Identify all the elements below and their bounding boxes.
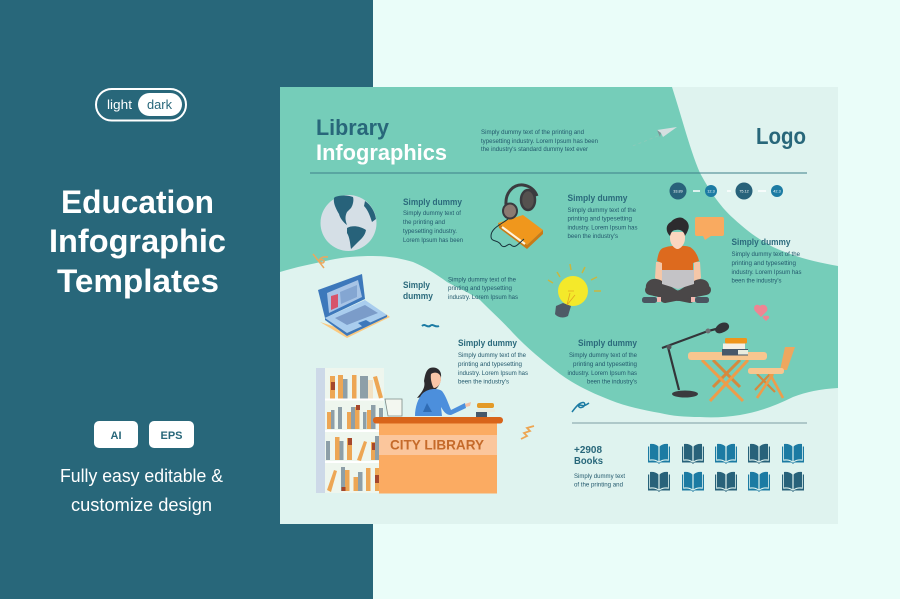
legs <box>650 290 706 298</box>
tagline: customize design <box>71 495 212 515</box>
intro text: Simply dummy text of the printing and <box>481 129 584 136</box>
icon: globe <box>320 195 376 251</box>
squiggle: orange <box>521 426 534 439</box>
text block: laptop heading: dummy <box>403 291 433 301</box>
speech bubble <box>695 217 724 240</box>
hair <box>667 218 689 236</box>
green wave background <box>280 87 838 417</box>
stat: books count <box>574 445 625 488</box>
text block: librarian: been the industry's <box>458 378 509 386</box>
main title: Education <box>61 184 214 220</box>
stat: books count: +2908 <box>574 445 602 456</box>
illustration: person with laptop <box>642 217 724 303</box>
text block: person: been the industry's <box>732 278 782 284</box>
shirt <box>657 246 699 270</box>
desk note <box>385 399 402 416</box>
illustration: librarian <box>385 367 495 417</box>
text block: globe: Simply dummy text of <box>403 210 461 217</box>
text block: person: printing and typesetting <box>732 260 796 267</box>
text block: desk lamp: Simply dummy text of the <box>569 352 637 359</box>
laptop <box>662 270 694 289</box>
badge: EPS: EPS <box>160 430 183 442</box>
feet <box>642 297 657 303</box>
intro text: the industry's standard dummy text ever <box>481 146 589 153</box>
logo: Logo <box>756 123 806 149</box>
main title: Infographic <box>49 223 226 259</box>
text block: laptop heading <box>403 280 433 301</box>
text block: person <box>732 237 802 284</box>
text block: desk lamp: printing and typesetting <box>573 361 637 368</box>
text block: headphones <box>568 193 638 240</box>
illustration: desk lamp <box>662 322 729 398</box>
intro text: typesetting industry. Lorem Ipsum has been <box>481 138 598 145</box>
stat: books count: of the printing and <box>574 482 623 488</box>
text block: desk lamp: been the industry's <box>587 378 637 386</box>
toggle: light dark <box>96 89 186 120</box>
text block: laptop body: industry. Lorem Ipsum has <box>448 294 518 301</box>
text block: laptop body <box>448 276 518 301</box>
illustration: chair <box>748 347 795 398</box>
text block: globe: typesetting industry. <box>403 228 457 235</box>
squiggle: blue <box>422 325 439 326</box>
intro text <box>481 129 598 153</box>
text block: librarian: Simply dummy text of the <box>458 352 526 359</box>
heading: Library Infographics: Infographics <box>316 140 447 165</box>
main title <box>49 184 226 299</box>
badge: AI: AI <box>110 430 122 442</box>
icon: hearts <box>754 305 769 321</box>
text block: person: Simply dummy text of the <box>732 251 800 258</box>
illustration: library desk: CITY LIBRARY <box>390 436 485 452</box>
text block: headphones: Simply dummy <box>568 193 628 203</box>
text block: desk lamp: Simply dummy <box>578 338 637 348</box>
divider <box>572 422 807 424</box>
icon: headphones and book <box>491 185 543 249</box>
text block: desk lamp <box>568 338 637 386</box>
stat: books count: Books <box>574 456 603 467</box>
panel: left cover <box>0 0 373 599</box>
text block: laptop body: printing and typesetting <box>448 285 512 292</box>
illustration: library desk <box>373 417 503 494</box>
number flow: 33.89 <box>673 190 683 194</box>
badge: AI <box>94 421 138 448</box>
text block: person: Simply dummy <box>732 237 791 247</box>
text block: librarian: Simply dummy <box>458 338 517 348</box>
toggle: light dark: dark <box>147 97 172 112</box>
badge: EPS <box>149 421 194 448</box>
icon: paper plane <box>630 127 677 147</box>
head <box>670 232 685 249</box>
heading: Library Infographics <box>316 115 447 165</box>
text block: headphones: industry. Lorem Ipsum has <box>568 224 638 232</box>
number flow: 12.3 <box>707 190 715 194</box>
text block: headphones: Simply dummy text of the <box>568 207 636 214</box>
text block: headphones: printing and typesetting <box>568 216 632 222</box>
number flow: 42.3 <box>773 190 781 194</box>
text block: laptop heading: Simply <box>403 280 430 290</box>
arms <box>655 262 668 286</box>
stat: books count: Simply dummy text <box>574 473 625 480</box>
text block: laptop body: Simply dummy text of the <box>448 276 516 284</box>
pictogram: books grid <box>648 444 804 492</box>
small books <box>477 403 494 408</box>
number flow <box>670 182 783 200</box>
text block: globe: Lorem Ipsum has been <box>403 237 463 244</box>
icon: scissors mark <box>313 254 328 268</box>
icon: light bulb <box>548 264 601 317</box>
text block: globe: the printing and <box>403 219 445 226</box>
icon: loop squiggle <box>572 402 589 412</box>
number flow: 75.12 <box>739 190 749 194</box>
text block: librarian <box>458 338 528 386</box>
heading: Library Infographics: Library <box>316 115 389 140</box>
illustration: table with books <box>688 338 767 401</box>
text block: librarian: industry. Lorem Ipsum has <box>458 370 528 377</box>
text block: globe: Simply dummy <box>403 197 462 207</box>
text block: globe <box>403 197 463 244</box>
illustration: bookshelf <box>316 368 384 493</box>
toggle: light dark: light <box>107 97 132 112</box>
tagline <box>60 466 223 515</box>
divider <box>310 172 807 174</box>
text block: desk lamp: industry. Lorem Ipsum has <box>568 370 637 377</box>
text block: headphones: been the industry's <box>568 233 618 240</box>
main title: Templates <box>57 263 219 299</box>
text block: librarian: printing and typesetting <box>458 361 522 368</box>
icon: laptop <box>318 274 390 338</box>
panel: infographic <box>280 87 838 524</box>
text block: person: industry. Lorem Ipsum has <box>732 269 802 276</box>
tagline: Fully easy editable & <box>60 466 223 486</box>
